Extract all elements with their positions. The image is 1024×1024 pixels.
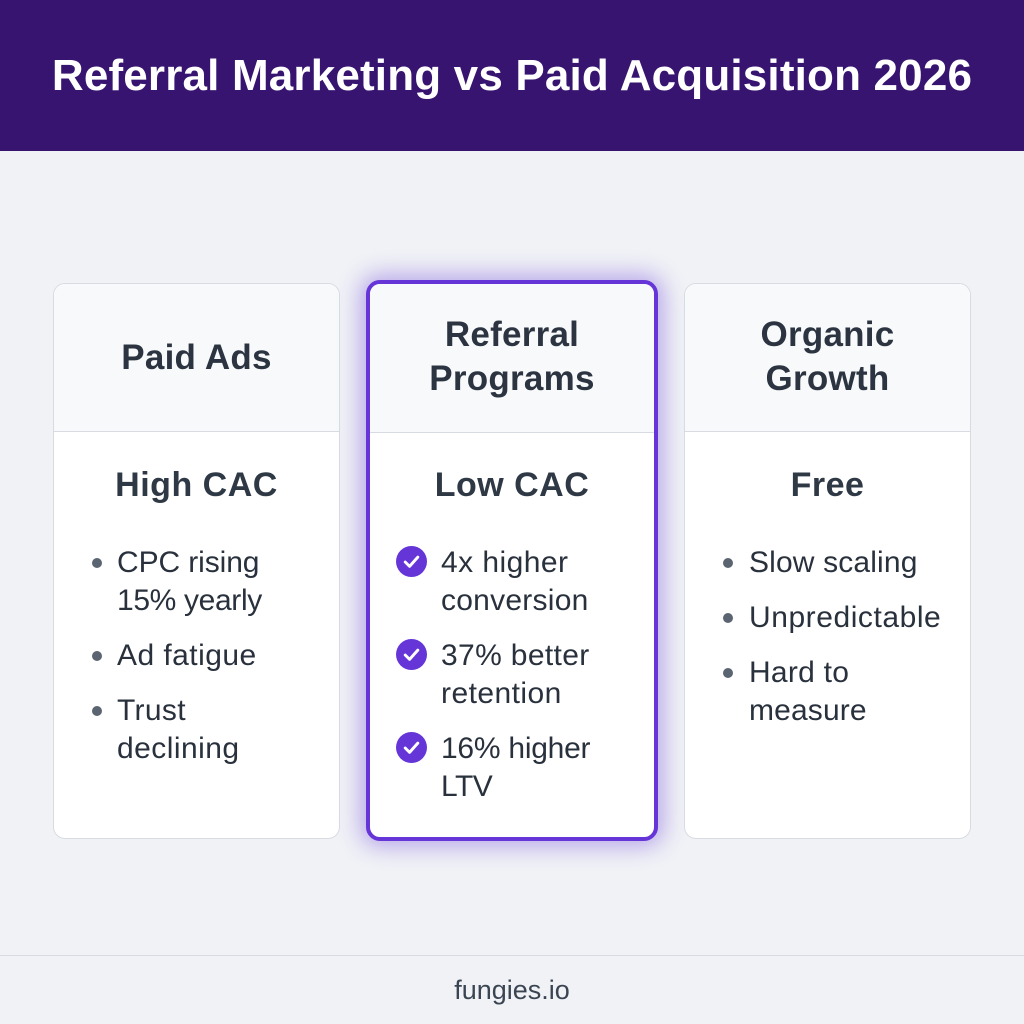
metric: low CAC: Low CAC [435,466,589,504]
check list: referral programs: 37% better [441,639,590,672]
title: Referral Marketing vs Paid Acquisition 2026 [52,51,972,100]
bullet list: paid ads: Trust [117,694,186,727]
heading: referral programs: Programs [429,359,595,398]
check list: referral programs [396,546,590,803]
heading: referral programs [370,284,654,433]
bullet list: paid ads: Ad fatigue [117,639,257,672]
bullet list: organic growth [723,546,941,727]
icon: check [396,639,427,670]
heading: organic growth: Growth [766,359,889,398]
icon: check [396,546,427,577]
check list: referral programs: retention [441,677,562,710]
heading: paid ads [54,284,339,432]
heading: organic growth [685,284,970,432]
panel: organic growth [684,283,971,839]
header banner [0,0,1024,151]
bullet list: organic growth: Hard to [749,656,849,689]
metric: high CAC: High CAC [115,466,278,504]
check list: referral programs: 4x higher [441,546,568,579]
footer [0,955,1024,1024]
check list: referral programs: conversion [441,584,589,617]
bullet list: paid ads [92,546,262,765]
bullet list: paid ads: 15% yearly [117,584,262,617]
check list: referral programs: 16% higher [441,732,590,765]
footer text: fungies.io [454,975,570,1005]
bullet list: organic growth: measure [749,694,867,727]
metric: free: Free [791,466,864,504]
heading: referral programs: Referral [445,315,579,354]
bullet list: paid ads: declining [117,732,239,765]
panel: referral programs [366,280,658,841]
bullet list: paid ads: CPC rising [117,546,259,579]
bullet list: organic growth: Slow scaling [749,546,918,579]
panel: paid ads [53,283,340,839]
bullet list: organic growth: Unpredictable [749,601,941,634]
heading: paid ads: Paid Ads [121,338,272,377]
check list: referral programs: LTV [441,770,492,803]
icon: check [396,732,427,763]
heading: organic growth: Organic [760,315,894,354]
